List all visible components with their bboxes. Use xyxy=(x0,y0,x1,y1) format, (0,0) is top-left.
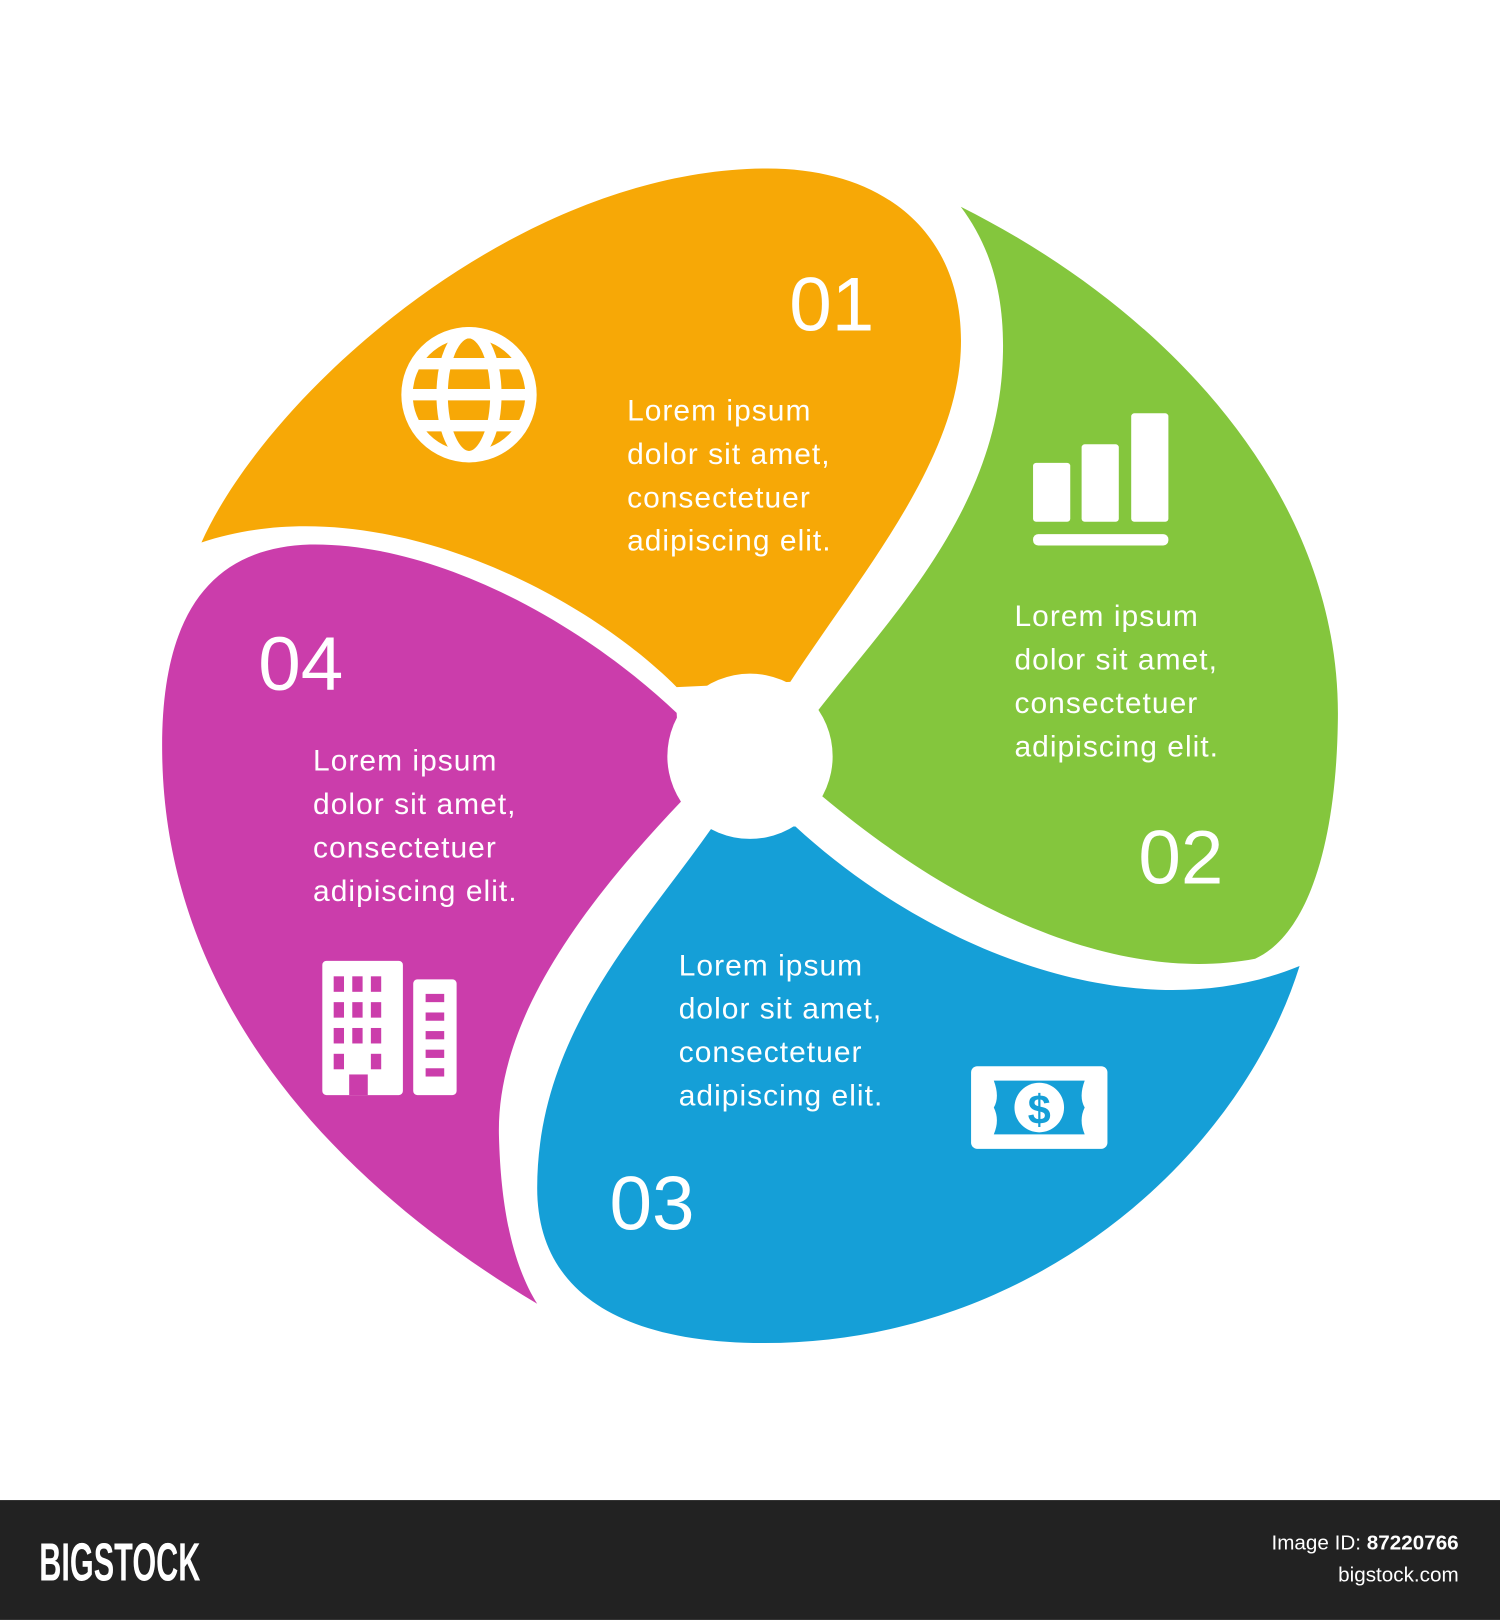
footer bar xyxy=(0,1500,1500,1620)
text block 03: Lorem ipsum xyxy=(679,949,863,982)
panel: 01 orange xyxy=(201,168,961,687)
footer id: Image ID: 87220766 xyxy=(1271,1532,1459,1555)
center hole xyxy=(667,674,833,839)
text block 02: Lorem ipsum xyxy=(1014,600,1199,633)
text block 03: consectetuer xyxy=(679,1036,863,1069)
panel: 02 green xyxy=(816,207,1338,964)
text block 02: dolor sit amet, xyxy=(1014,644,1218,677)
footer logo: BIGSTOCK xyxy=(39,1533,201,1593)
text block 04: dolor sit amet, xyxy=(313,788,517,821)
number 04: 04 xyxy=(258,622,343,707)
text block 01: dolor sit amet, xyxy=(627,438,831,471)
footer bar: bigstock.com xyxy=(1338,1564,1459,1587)
panel: 04 pink xyxy=(162,544,682,1304)
text block 04: consectetuer xyxy=(313,832,497,865)
icon: globe xyxy=(407,333,531,457)
text block 01: adipiscing elit. xyxy=(627,525,832,558)
text block 02: adipiscing elit. xyxy=(1014,730,1219,763)
icon: money xyxy=(971,1066,1107,1149)
text block 04: Lorem ipsum xyxy=(313,745,497,778)
text block 02: consectetuer xyxy=(1014,687,1198,720)
number 01: 01 xyxy=(789,263,874,348)
text block 03: dolor sit amet, xyxy=(679,993,882,1026)
text block 03: adipiscing elit. xyxy=(679,1079,883,1112)
text block 01: Lorem ipsum xyxy=(627,395,811,428)
icon: money: $ xyxy=(1028,1087,1051,1133)
icon: bar chart xyxy=(1033,413,1168,546)
number 02: 02 xyxy=(1138,815,1223,900)
text block 04: adipiscing elit. xyxy=(313,875,518,908)
text block 01: consectetuer xyxy=(627,481,811,514)
panel: 03 blue xyxy=(537,827,1300,1343)
number 03: 03 xyxy=(610,1161,695,1246)
icon: buildings xyxy=(322,961,457,1095)
